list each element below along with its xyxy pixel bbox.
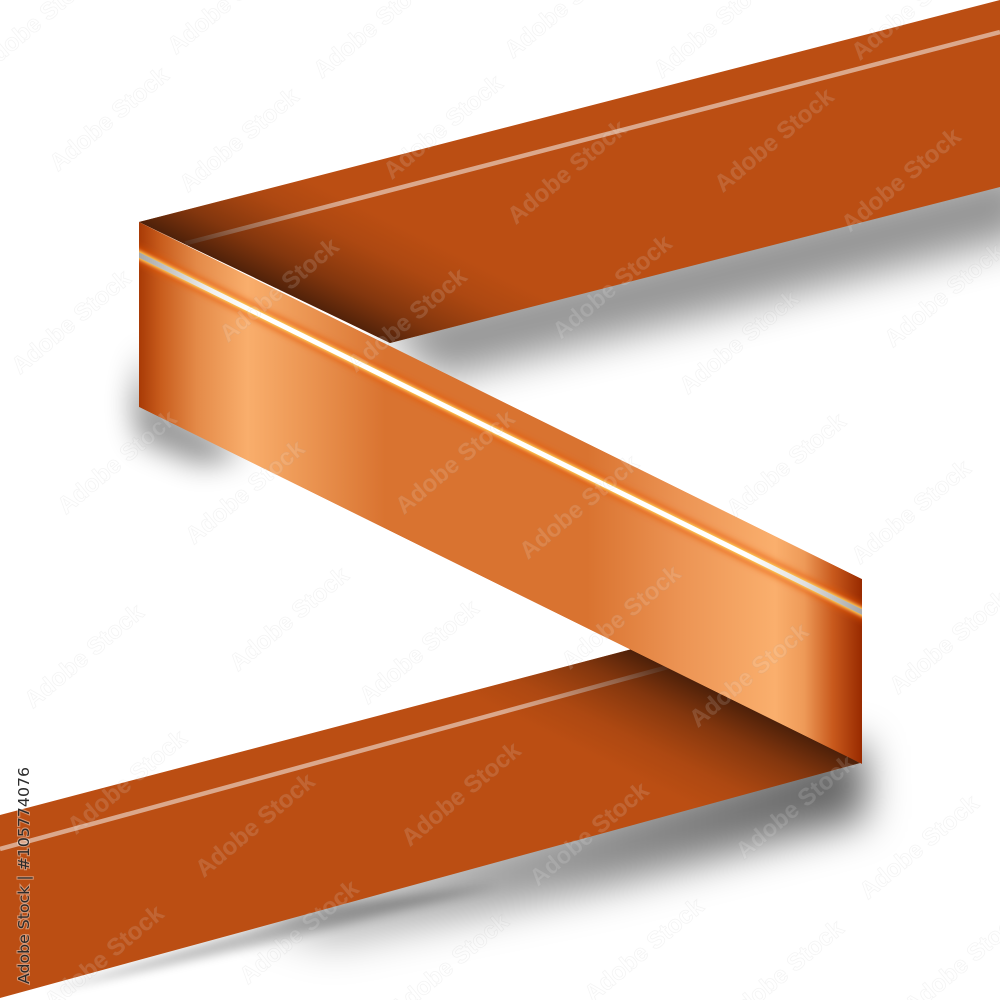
watermark text: Adobe Stock [854,789,985,905]
middle folded band [130,222,870,764]
bottom ribbon fold shading [0,647,860,998]
watermark text: Adobe Stock [730,749,861,865]
watermark text: Adobe Stock [502,114,633,230]
shadow under top ribbon [380,160,1000,378]
watermark text: Adobe Stock [556,559,687,675]
watermark text: Adobe Stock [214,232,345,348]
top ribbon [139,0,1000,343]
watermark text: Adobe Stock [234,874,365,990]
watermark text: Adobe Stock [342,262,473,378]
watermark text: Adobe Stock [6,264,137,380]
shadow under the left fold [132,345,245,465]
sharp tail of bottom ribbon shadow [45,885,500,992]
top ribbon fold shading [139,0,1000,343]
watermark text: Adobe Stock [390,404,521,520]
watermark text: Adobe Stock [44,61,175,177]
watermark text: Adobe Stock [684,617,815,733]
band highlight glow [130,250,870,616]
watermark text: Adobe Stock [354,594,485,710]
watermark text: Adobe Stock [19,598,150,714]
bottom ribbon pinstripe [0,667,668,849]
shadow under bottom ribbon [250,745,866,945]
watermark text: Adobe Stock [62,724,193,840]
vertical credit line: Adobe Stock | #105774076 [15,767,33,984]
watermark text: Adobe Stock [846,454,977,570]
watermark text: Adobe Stock [524,776,655,892]
watermark text: Adobe Stock [174,82,305,198]
watermark text: Adobe Stock [52,404,183,520]
watermark text: Adobe Stock [721,407,852,523]
watermark text: Adobe Stock [514,449,645,565]
band highlight halo [130,250,870,616]
top ribbon pinstripe [185,32,1000,244]
bottom ribbon [0,647,860,998]
watermark text: Adobe Stock [396,736,527,852]
watermark text: Adobe Stock [378,69,509,185]
watermark text: Adobe Stock [674,284,805,400]
watermark text: Adobe Stock [180,434,311,550]
band highlight core [130,250,870,616]
watermark text: Adobe Stock [547,229,678,345]
watermark text: Adobe Stock [190,767,321,883]
watermark text: Adobe Stock [224,561,355,677]
watermark text: Adobe Stock [836,122,967,238]
watermark text: Adobe Stock [709,82,840,198]
